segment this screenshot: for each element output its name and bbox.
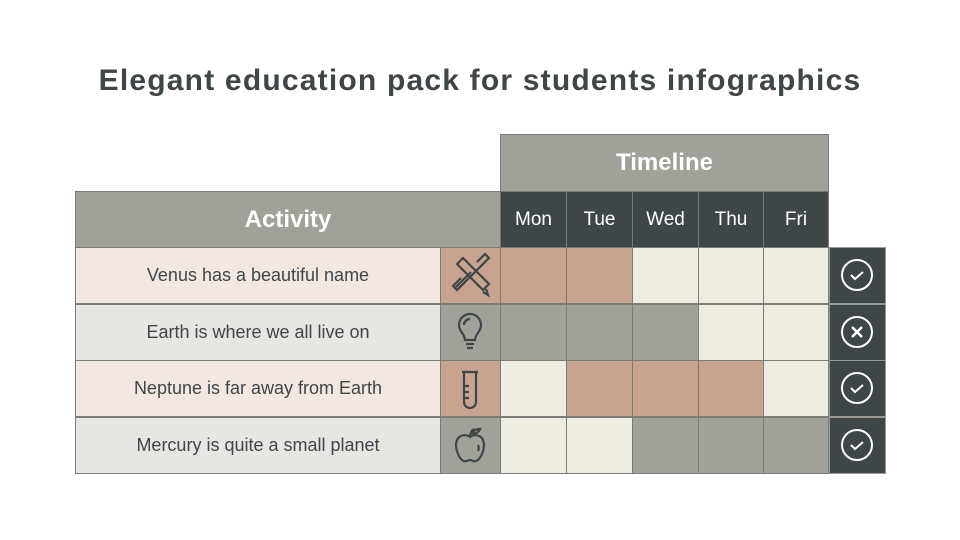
day headers: Fri	[785, 208, 807, 230]
day headers: Tue	[583, 208, 616, 230]
icon: bulb	[440, 304, 501, 361]
row 4: Mercury is quite a small planet	[136, 435, 380, 455]
activity header: Activity	[245, 206, 331, 232]
icon: check	[829, 360, 886, 417]
icon: cross	[829, 304, 886, 361]
icon: apple	[440, 417, 501, 474]
row 1	[75, 247, 886, 304]
day headers: Wed	[646, 208, 685, 230]
day headers: Thu	[715, 208, 747, 230]
icon: check	[829, 247, 886, 304]
day headers: Mon	[515, 208, 552, 230]
row 1: Venus has a beautiful name	[147, 265, 369, 285]
day headers	[501, 192, 829, 247]
icon: test tube	[440, 360, 501, 417]
icon: check	[829, 417, 886, 474]
row 4	[75, 417, 886, 474]
timeline header	[500, 134, 829, 192]
activity header	[75, 191, 501, 248]
icon: ruler pencil	[440, 247, 501, 304]
row 3	[75, 361, 886, 417]
row 2	[75, 304, 886, 360]
row 2: Earth is where we all live on	[146, 322, 370, 342]
title: Elegant education pack for students infographics	[99, 64, 861, 97]
timeline header: Timeline	[616, 149, 713, 176]
row 3: Neptune is far away from Earth	[134, 378, 382, 398]
